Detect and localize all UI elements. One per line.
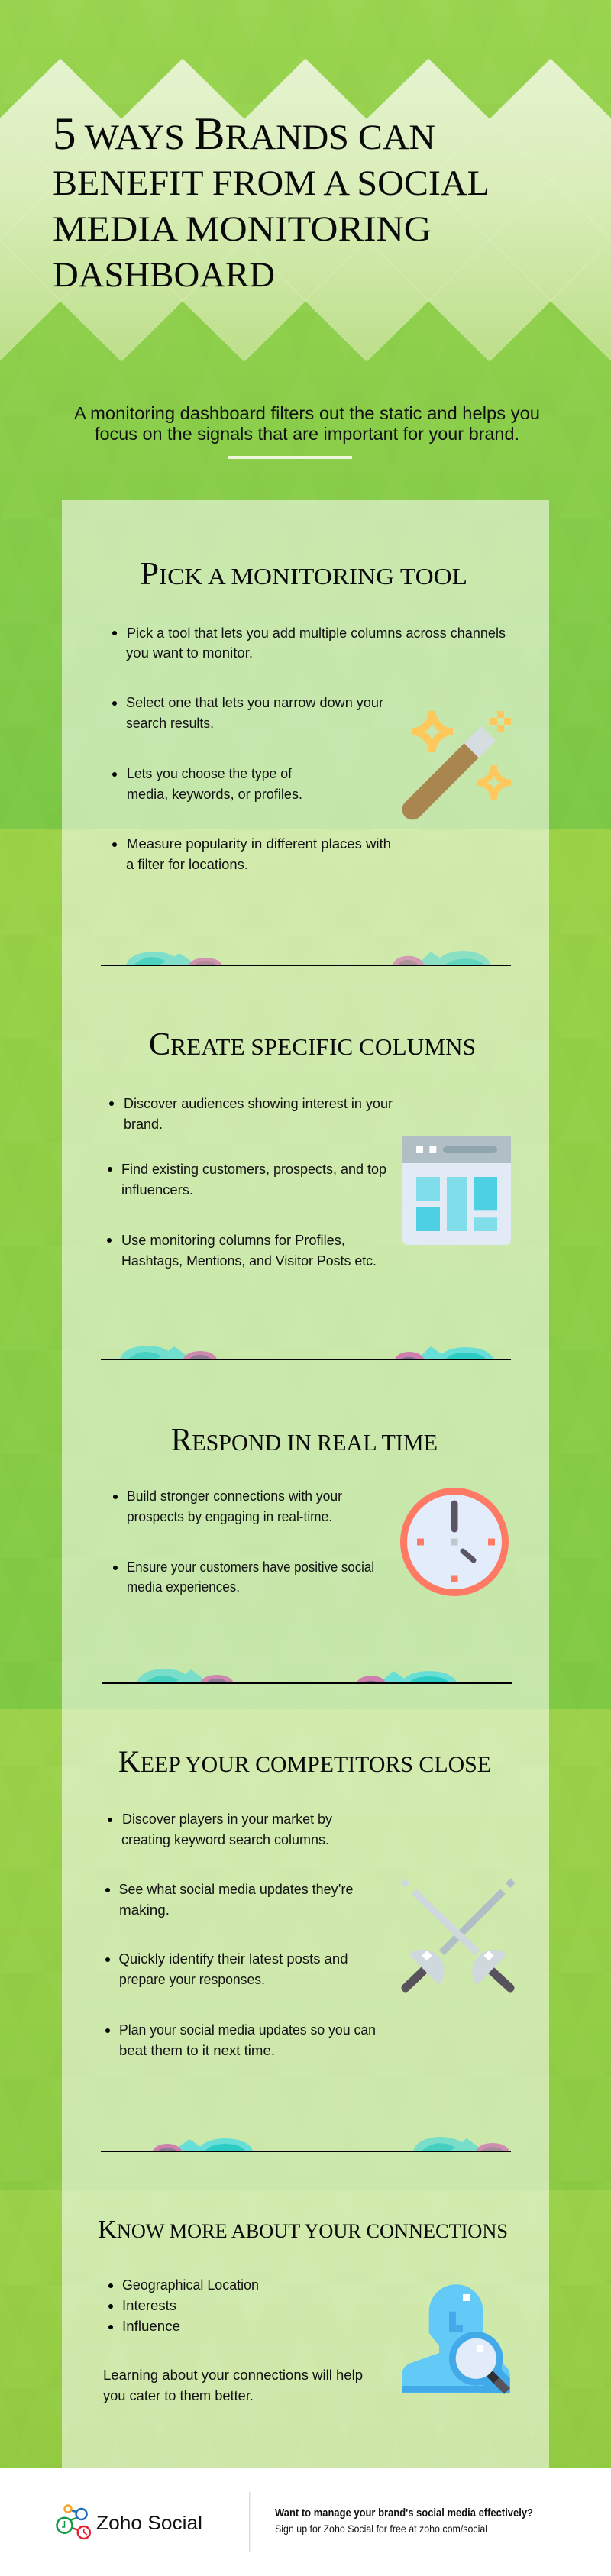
logo: Zoho Social: Zoho Social bbox=[96, 2513, 202, 2534]
icon: dashboard window bbox=[402, 1136, 511, 1245]
bullet list: beat them to it next time. bbox=[119, 2042, 275, 2058]
bullet list bbox=[112, 625, 506, 872]
icon: person with magnifier bbox=[402, 2284, 510, 2393]
closing text: Learning about your connections will help bbox=[103, 2367, 363, 2383]
heading: RESPOND IN REAL TIME bbox=[171, 1423, 438, 1458]
bullet list: media experiences. bbox=[127, 1579, 240, 1595]
logo: Zoho Social bbox=[57, 2505, 202, 2539]
heading: KNOW MORE ABOUT YOUR CONNECTIONS bbox=[98, 2216, 508, 2244]
bullet list bbox=[107, 1095, 393, 1269]
bullet list: See what social media updates they’re bbox=[119, 1881, 353, 1897]
divider with hills bbox=[101, 951, 511, 966]
title: DASHBOARD bbox=[53, 255, 275, 295]
list: Influence bbox=[122, 2318, 180, 2334]
divider with hills bbox=[101, 2137, 511, 2152]
bullet list: search results. bbox=[126, 715, 214, 731]
icon: crossed swords bbox=[400, 1878, 516, 1988]
title bbox=[53, 108, 490, 295]
bullet list: prospects by engaging in real-time. bbox=[127, 1508, 332, 1524]
list: Geographical Location bbox=[122, 2277, 259, 2293]
bullet list: a filter for locations. bbox=[126, 856, 248, 872]
title: MEDIA MONITORING bbox=[53, 209, 432, 249]
bullet list: brand. bbox=[124, 1116, 163, 1132]
bullet list: you want to monitor. bbox=[126, 645, 253, 661]
divider with hills bbox=[101, 1346, 511, 1360]
divider with hills bbox=[102, 1669, 512, 1684]
list bbox=[108, 2277, 259, 2334]
bullet list: media, keywords, or profiles. bbox=[127, 786, 302, 802]
closing text bbox=[103, 2367, 363, 2403]
list: Interests bbox=[122, 2297, 176, 2313]
bullet list: Pick a tool that lets you add multiple columns across channels bbox=[127, 625, 506, 641]
panel: content background bbox=[62, 500, 549, 2468]
section 5: know more about your connections bbox=[98, 2216, 510, 2403]
bullet list: making. bbox=[119, 1902, 170, 1918]
section 1: pick a monitoring tool bbox=[101, 557, 511, 966]
bullet list: Quickly identify their latest posts and bbox=[119, 1951, 348, 1967]
call to action text: Want to manage your brand's social media effectively? bbox=[275, 2507, 533, 2519]
bullet list: influencers. bbox=[121, 1181, 193, 1198]
bullet list: Hashtags, Mentions, and Visitor Posts etc. bbox=[121, 1252, 377, 1269]
title: 5 WAYS BRANDS CAN bbox=[53, 108, 435, 159]
intro underline bbox=[228, 456, 352, 459]
intro text: A monitoring dashboard filters out the static and helps you bbox=[74, 403, 540, 423]
call to action text: Sign up for Zoho Social for free at zoho.com/social bbox=[275, 2523, 487, 2535]
bullet list: Plan your social media updates so you can bbox=[119, 2022, 376, 2038]
closing text: you cater to them better. bbox=[103, 2387, 254, 2403]
heading: KEEP YOUR COMPETITORS CLOSE bbox=[118, 1744, 491, 1779]
section 2: create specific columns bbox=[101, 1027, 511, 1360]
title: BENEFIT FROM A SOCIAL bbox=[53, 163, 490, 203]
section 3: respond in real time bbox=[102, 1423, 512, 1684]
intro text bbox=[74, 403, 540, 444]
bullet list: Measure popularity in different places with bbox=[127, 836, 391, 852]
bullet list: Discover audiences showing interest in your bbox=[124, 1095, 393, 1111]
icon: magic wand bbox=[402, 711, 511, 819]
footer bbox=[0, 2468, 611, 2576]
heading: CREATE SPECIFIC COLUMNS bbox=[149, 1027, 476, 1062]
bullet list: Find existing customers, prospects, and top bbox=[121, 1161, 386, 1177]
bullet list: Build stronger connections with your bbox=[127, 1488, 342, 1504]
bullet list: Discover players in your market by bbox=[122, 1811, 333, 1827]
bullet list: Select one that lets you narrow down your bbox=[126, 694, 383, 710]
icon: clock bbox=[403, 1491, 506, 1593]
bullet list: Use monitoring columns for Profiles, bbox=[121, 1232, 345, 1248]
bullet list: creating keyword search columns. bbox=[121, 1831, 329, 1847]
bullet list: Ensure your customers have positive social bbox=[127, 1559, 374, 1575]
bullet list bbox=[105, 1811, 376, 2058]
header diamond pattern bbox=[0, 59, 611, 361]
footer divider bbox=[249, 2492, 251, 2552]
heading: PICK A MONITORING TOOL bbox=[140, 557, 467, 592]
bullet list bbox=[113, 1488, 374, 1595]
bullet list: prepare your responses. bbox=[119, 1971, 265, 1987]
call to action text bbox=[275, 2507, 533, 2535]
intro text: focus on the signals that are important for your brand. bbox=[95, 424, 519, 444]
section 4: keep your competitors close bbox=[101, 1744, 516, 2152]
bullet list: Lets you choose the type of bbox=[127, 765, 293, 781]
